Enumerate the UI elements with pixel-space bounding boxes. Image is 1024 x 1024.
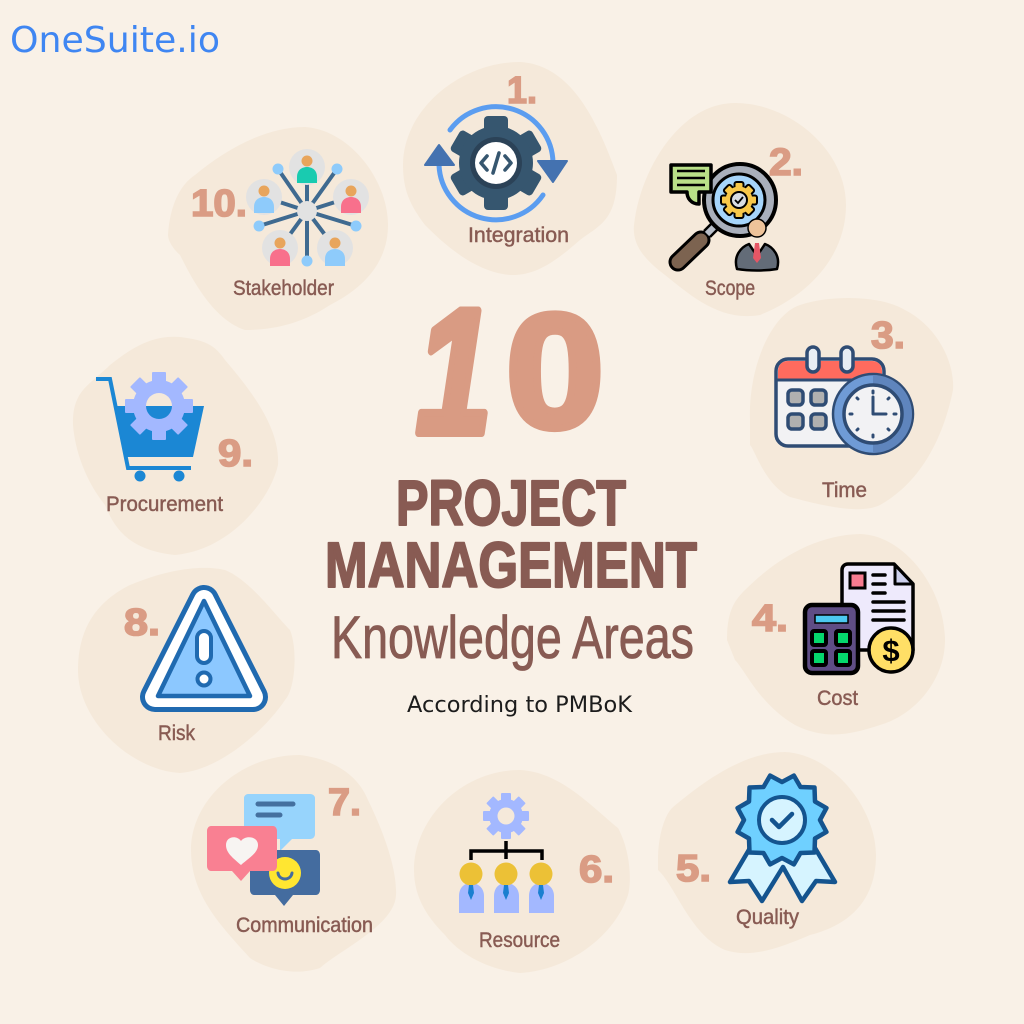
icon: magnifier, speech bubble, person bbox=[671, 164, 778, 270]
number 3: 3. bbox=[871, 315, 905, 357]
label: Procurement: Procurement bbox=[106, 493, 223, 516]
label: Quality: Quality bbox=[736, 906, 799, 929]
number 1: 1. bbox=[507, 70, 537, 112]
icon: document, calculator and coin bbox=[805, 564, 913, 673]
number 2: 2. bbox=[769, 142, 803, 184]
number 5: 5. bbox=[676, 848, 711, 890]
number 6: 6. bbox=[579, 849, 614, 891]
icon: gear above team hierarchy bbox=[459, 793, 554, 913]
caption: According to PMBoK: According to PMBoK bbox=[407, 693, 633, 718]
logo text: OneSuite.io bbox=[10, 20, 220, 61]
icon: award rosette bbox=[730, 776, 835, 901]
panel: 9 Procurement bbox=[73, 337, 278, 555]
number 10: 10. bbox=[191, 183, 247, 225]
icon: warning triangle bbox=[155, 600, 253, 697]
number 7: 7. bbox=[328, 782, 361, 824]
main number 10 bbox=[416, 272, 604, 471]
label: Resource: Resource bbox=[479, 929, 560, 952]
label: Integration: Integration bbox=[468, 224, 569, 247]
panel: 10 Stakeholder bbox=[168, 127, 388, 330]
icon: calendar and clock bbox=[776, 347, 913, 454]
number 9: 9. bbox=[218, 433, 253, 475]
icon: gear with cycle arrows bbox=[425, 107, 567, 220]
number 8: 8. bbox=[124, 602, 160, 644]
panel: 4 Cost bbox=[727, 534, 945, 734]
icon: chat bubbles bbox=[207, 794, 320, 906]
subtitle: Knowledge Areas: Knowledge Areas bbox=[331, 604, 694, 671]
panel: 7 Communication bbox=[191, 755, 396, 972]
label: Stakeholder: Stakeholder bbox=[233, 277, 334, 300]
panel: 6 Resource bbox=[414, 770, 630, 973]
title: Project: PROJECT bbox=[396, 467, 626, 539]
label: Cost: Cost bbox=[817, 687, 858, 710]
panel: 3 Time bbox=[750, 298, 953, 509]
number 4: 4. bbox=[752, 598, 788, 640]
panel: 2 Scope bbox=[634, 103, 846, 316]
icon: document, calculator and coin: $ bbox=[882, 633, 900, 668]
icon: stakeholder network bbox=[246, 149, 369, 266]
main number 10: 1 bbox=[416, 272, 492, 471]
main number 10: 0 bbox=[506, 281, 604, 462]
panel: 5 Quality bbox=[658, 752, 876, 953]
panel: 1 Integration bbox=[403, 62, 617, 275]
label: Time: Time bbox=[822, 479, 867, 502]
label: Communication: Communication bbox=[236, 914, 373, 937]
title: Management: MANAGEMENT bbox=[325, 529, 697, 601]
label: Scope: Scope bbox=[705, 277, 755, 300]
icon: shopping cart with gear bbox=[96, 372, 204, 482]
panel: 8 Risk bbox=[78, 568, 295, 773]
label: Risk: Risk bbox=[158, 722, 195, 745]
